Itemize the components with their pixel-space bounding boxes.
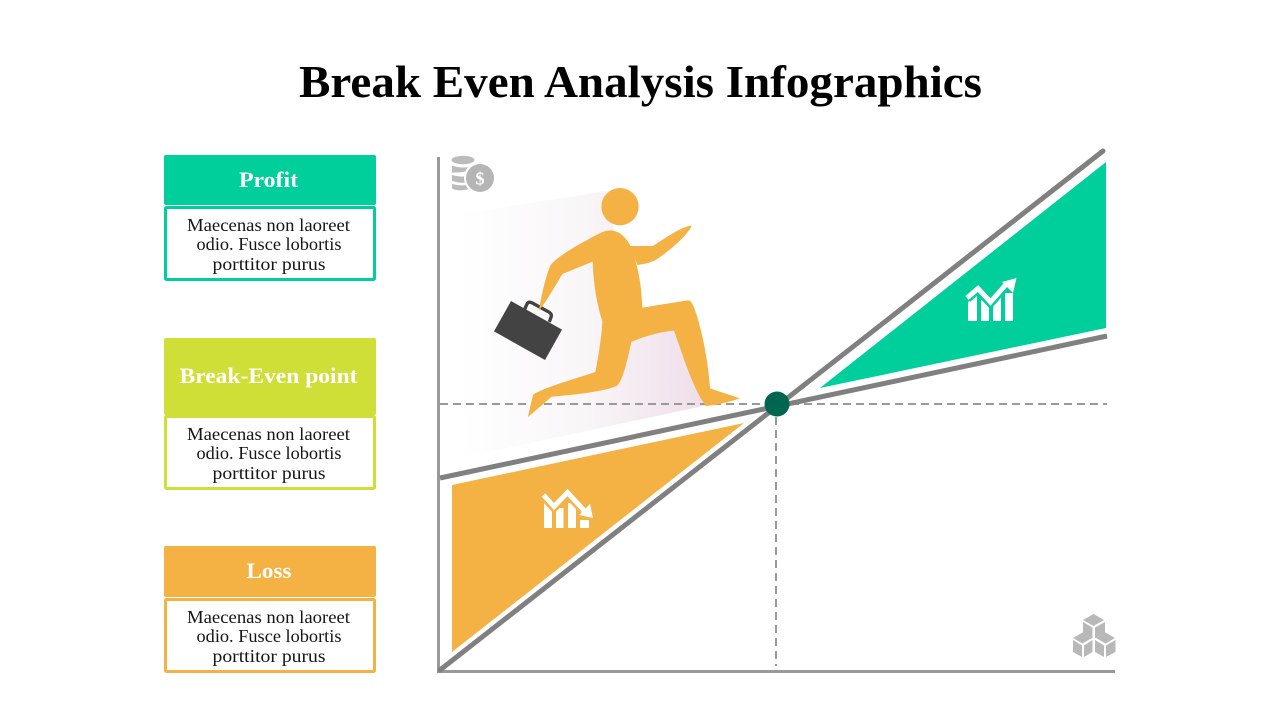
profit description: odio. Fusce lobortis [196,234,342,254]
chart: break-even [438,151,1116,672]
loss description: porttitor purus [212,646,326,666]
loss heading: Loss [246,558,292,583]
break-even heading [164,338,376,415]
runner far arm [630,225,692,265]
runner body [528,231,740,417]
break-even description: odio. Fusce lobortis [196,443,342,463]
title: Break Even Analysis Infographics [299,56,982,107]
panel: loss [164,546,376,672]
break-even heading: Break-Even point [180,363,358,388]
profit description: porttitor purus [212,254,326,274]
briefcase [494,301,562,360]
loss description: Maecenas non laoreet [187,607,350,627]
icon: coins [452,156,496,194]
loss description: odio. Fusce lobortis [196,626,342,646]
revenue line [440,151,1103,670]
panel: profit [164,155,376,280]
profit area [820,162,1106,388]
profit heading: Profit [239,167,299,192]
axes [438,157,1115,672]
icon: rising chart [967,278,1016,321]
runner shadow [460,191,708,457]
icon: boxes [1073,614,1116,657]
loss description [166,600,374,672]
loss area [452,423,744,652]
cost line [440,336,1107,478]
break-even marker [764,392,790,416]
dashed guide lines [440,404,1107,666]
panel: break-even point [164,338,376,488]
icon: falling chart [544,492,593,528]
runner head [601,188,639,225]
profit description [166,208,374,280]
runner figure [494,188,740,417]
icon: coins: $ [476,168,484,188]
break-even description: Maecenas non laoreet [187,424,350,444]
profit description: Maecenas non laoreet [187,215,350,235]
profit heading [164,155,376,205]
break-even description [166,416,374,488]
loss heading [164,546,376,597]
break-even description: porttitor purus [212,463,326,483]
